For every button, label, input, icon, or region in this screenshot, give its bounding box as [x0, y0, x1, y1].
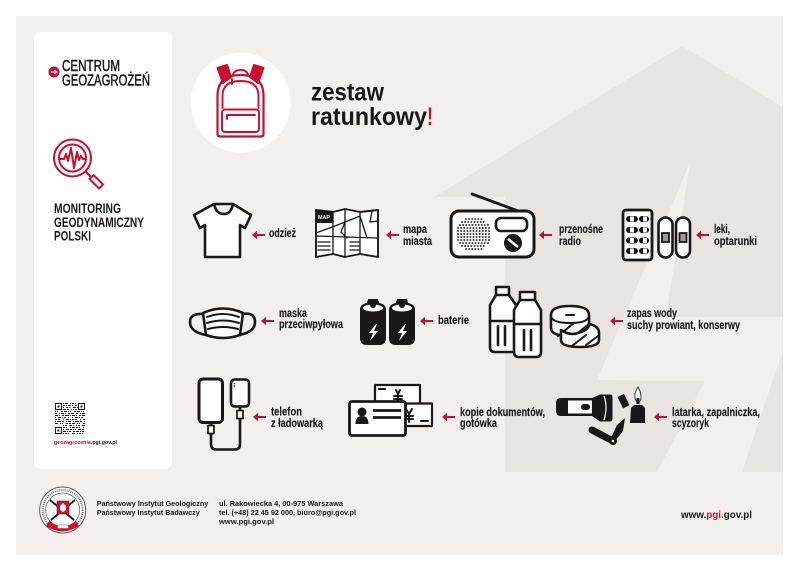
icon: water bottles and tins: [490, 287, 599, 357]
arrow: water and food: [610, 317, 623, 325]
footer: contact details: ul. Rakowiecka 4, 00-975 Warszawa: [219, 499, 344, 508]
logo: PGI seal: [40, 487, 86, 533]
footer: institute name: [97, 499, 209, 517]
label: medicine: leki,: [714, 224, 730, 236]
label: map: mapa: [403, 224, 427, 236]
icon: city map: MAP: [318, 215, 330, 221]
label: radio: przenośne: [559, 224, 603, 236]
icon: phone and power bank: [199, 379, 249, 450]
heading: Monitoring Geodynamiczny Polski: GEODYNAMICZNY: [54, 214, 144, 230]
label: batteries: baterie: [438, 315, 469, 327]
label: phone: telefon: [271, 407, 302, 419]
label: mask: przeciwpyłowa: [279, 319, 343, 331]
logo: Centrum Geozagrożeń: CENTRUM: [62, 58, 120, 75]
arrow: phone: [253, 413, 266, 421]
icon: t-shirt: [194, 204, 251, 257]
label: documents: kopie dokumentów,: [460, 407, 545, 419]
label: flashlight: [672, 407, 760, 430]
footer: institute name: Państwowy Instytut Badawczy: [97, 508, 201, 517]
footer: contact details: www.pgi.gov.pl: [218, 517, 274, 526]
QR caption: geozagrozenia.pgi.gov.pl: [54, 440, 117, 446]
arrow: map: [386, 231, 399, 239]
logo: Centrum Geozagrożeń: GEOZAGROŻEŃ: [62, 70, 150, 90]
icon: face mask: [190, 308, 255, 338]
title: ratunkowy: [311, 103, 427, 131]
label: flashlight: latarka, zapalniczka,: [672, 407, 760, 419]
label: radio: radio: [559, 236, 581, 248]
heading: Monitoring Geodynamiczny Polski: POLSKI: [54, 227, 91, 243]
label: phone: [271, 407, 323, 430]
label: clothes: odzież: [269, 228, 296, 240]
logo: Centrum Geozagrożeń: [48, 58, 150, 90]
label: medicine: optarunki: [714, 236, 757, 248]
title: zestaw: [311, 79, 384, 107]
title: !: [427, 103, 433, 131]
icon: documents and cash: [350, 385, 432, 436]
icon: city map: [316, 209, 378, 257]
arrow: flashlight: [654, 413, 667, 421]
label: water and food: [627, 308, 740, 332]
label: map: miasta: [403, 236, 432, 248]
label: flashlight: scyzoryk: [672, 418, 709, 430]
label: mask: [279, 308, 343, 331]
title: [311, 79, 433, 131]
arrow: medicine: [696, 231, 709, 239]
icon: radio: [451, 194, 534, 257]
QR code: [55, 404, 85, 434]
label: water and food: zapas wody: [627, 308, 677, 320]
panel: sidebar card: [34, 32, 172, 469]
arrow: radio: [539, 231, 552, 239]
label: radio: [559, 224, 603, 248]
heading: Monitoring Geodynamiczny Polski: MONITORING: [54, 200, 121, 216]
icon: magnifier with seismogram: [54, 140, 103, 188]
heading: Monitoring Geodynamiczny Polski: [54, 200, 144, 243]
label: medicine: [714, 224, 757, 248]
icon: batteries: [360, 299, 415, 345]
icon: pills and plasters: [623, 210, 690, 260]
label: documents: gotówka: [460, 418, 497, 430]
label: phone: z ładowarką: [271, 418, 323, 430]
label: mask: maska: [279, 308, 307, 320]
label: water and food: suchy prowiant, konserwy: [627, 320, 740, 332]
background house with lightning: [434, 46, 783, 472]
arrow: mask: [261, 317, 274, 325]
label: map: [403, 224, 432, 248]
arrow: clothes: [252, 231, 265, 239]
icon: backpack in circle: [191, 53, 291, 153]
icon: flashlight, lighter and pocket knife: [556, 387, 645, 445]
label: documents: [460, 407, 545, 430]
arrow: documents: [442, 413, 455, 421]
footer: website: www.pgi.gov.pl: [680, 510, 752, 521]
footer: institute name: Państwowy Instytut Geologiczny: [97, 499, 209, 508]
footer: contact details: tel. (+48) 22 45 92 000, biuro@pgi.gov.pl: [219, 508, 356, 517]
arrow: batteries: [420, 317, 433, 325]
footer: contact details: [218, 499, 356, 526]
